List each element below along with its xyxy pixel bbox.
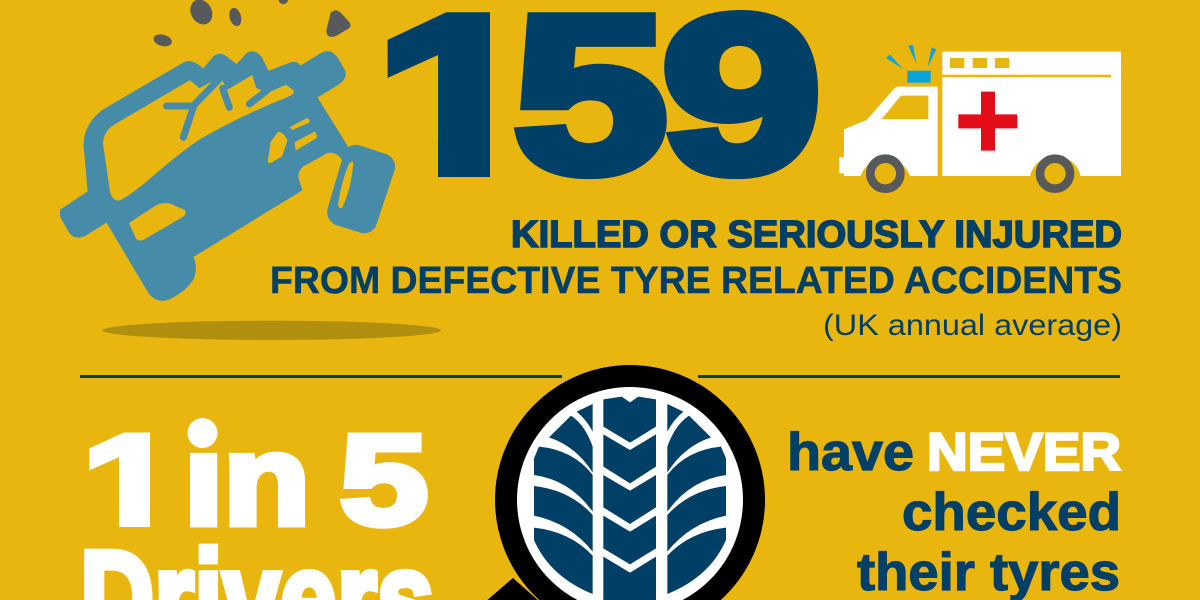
text: have never checked their tyres: NEVER — [927, 423, 1121, 482]
ambulance cab — [839, 87, 938, 176]
text: have never checked their tyres: have — [787, 423, 914, 482]
handle — [485, 578, 540, 600]
stat: 1 in 5 drivers: 5 — [340, 409, 428, 552]
text: have never checked their tyres: checked — [902, 483, 1121, 542]
icon: crashed car with debris — [61, 0, 441, 340]
windows and stripe — [882, 58, 1111, 119]
stat: 1 in 5 drivers — [80, 409, 434, 600]
lens ring — [506, 376, 754, 600]
big number 159 — [388, 10, 818, 180]
note: UK annual average: (UK annual average) — [823, 309, 1122, 342]
wheels — [870, 159, 1070, 189]
windshield cracks — [167, 78, 267, 137]
headline: killed or seriously injured: KILLED OR SERIOUSLY INJURED — [511, 214, 1122, 256]
stat: 1 in 5 drivers: 1 — [82, 409, 182, 552]
icon: magnifying glass over tyre tread — [485, 376, 754, 600]
divider — [80, 375, 1120, 378]
subhead: defective tyre accidents: FROM DEFECTIVE TYRE RELATED ACCIDENTS — [270, 260, 1122, 302]
siren light — [886, 45, 936, 83]
debris — [152, 0, 351, 48]
tyre tread — [534, 397, 726, 600]
ambulance box — [942, 52, 1121, 176]
stat: 1 in 5 drivers: in — [184, 409, 310, 552]
icon: ambulance — [839, 45, 1121, 189]
car body — [61, 52, 394, 300]
red cross — [958, 92, 1017, 151]
car shadow — [102, 321, 441, 340]
text: have never checked their tyres — [787, 423, 1121, 600]
